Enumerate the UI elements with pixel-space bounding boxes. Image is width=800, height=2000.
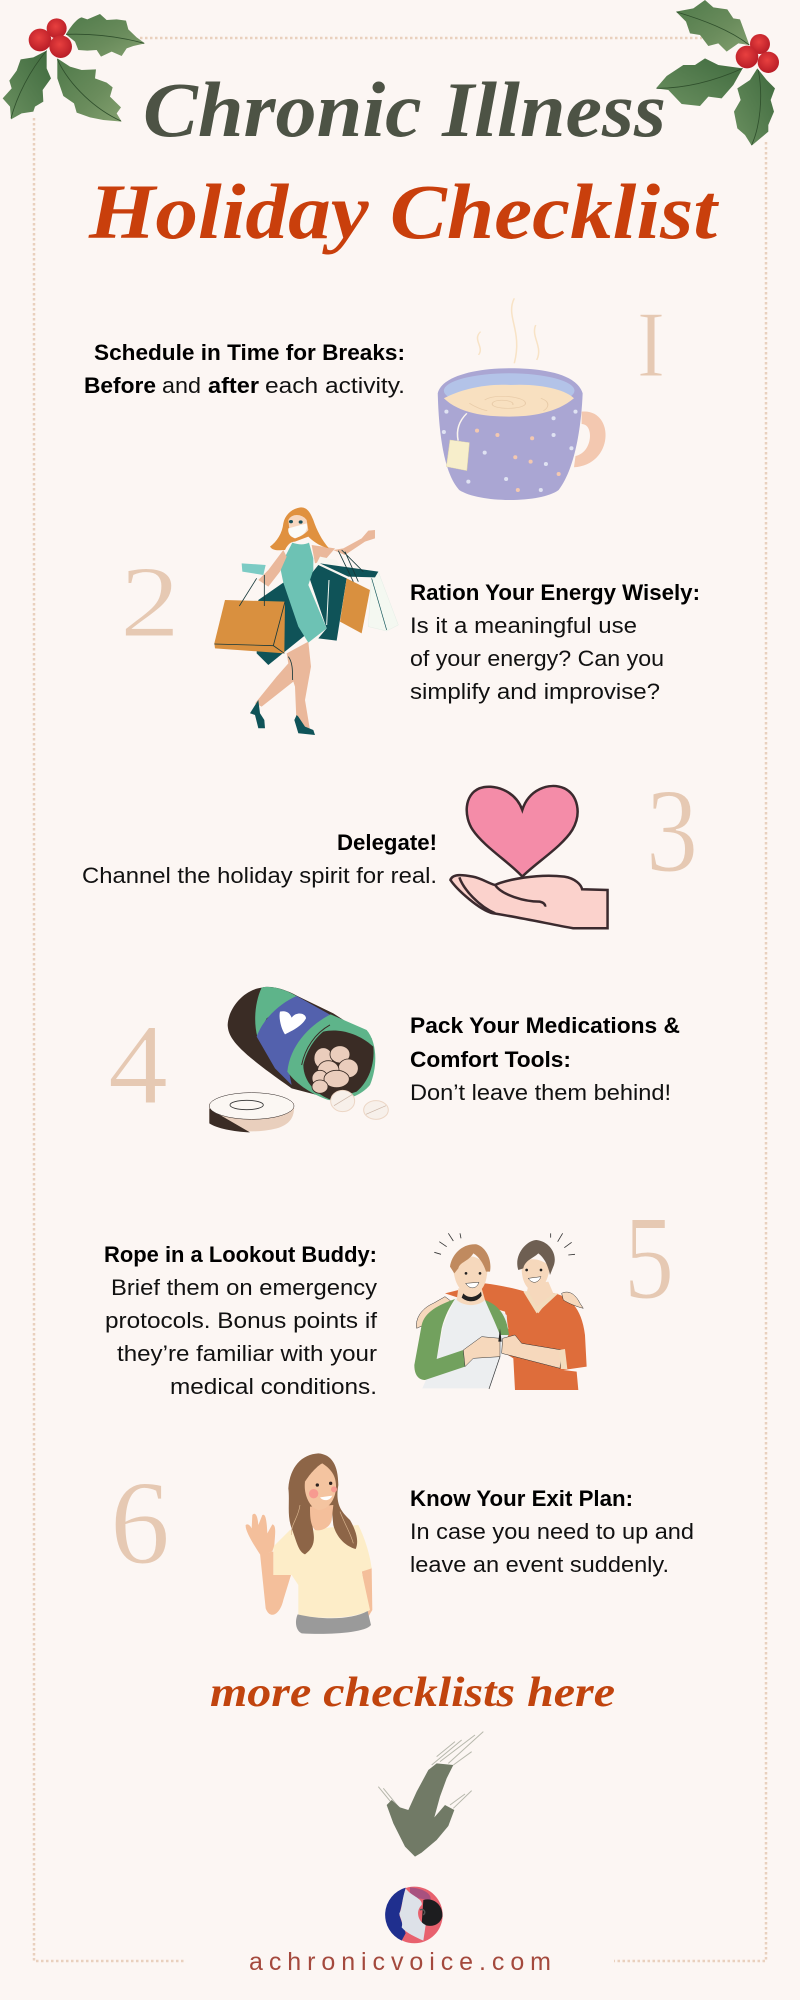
item 1 text: Schedule in Time for Breaks: xyxy=(94,340,405,365)
icon: heart held in a hand xyxy=(450,786,608,928)
item 5 text: Rope in a Lookout Buddy: xyxy=(104,1242,377,1267)
illustration: waving woman xyxy=(246,1453,372,1634)
item 4 text: Comfort Tools: xyxy=(410,1047,571,1072)
number 3: 3 xyxy=(646,764,698,897)
logo xyxy=(385,1887,443,1943)
item 5 text: medical conditions. xyxy=(170,1374,377,1399)
item 1 text: after xyxy=(208,373,259,398)
item 6 text: leave an event suddenly. xyxy=(410,1552,669,1577)
item 2 text xyxy=(410,580,700,704)
title xyxy=(88,66,720,255)
number 6: 6 xyxy=(110,1456,170,1589)
title: Chronic Illness xyxy=(143,66,666,153)
item 2 text: Ration Your Energy Wisely: xyxy=(410,580,700,605)
item 6 text: Know Your Exit Plan: xyxy=(410,1486,633,1511)
website: achronicvoice.com xyxy=(249,1948,551,1976)
arrow: brushstroke pointing down xyxy=(378,1732,483,1857)
item 3 text: Channel the holiday spirit for real. xyxy=(82,863,437,888)
call to action heading: more checklists here xyxy=(210,1670,615,1716)
number 5: 5 xyxy=(624,1191,674,1324)
illustration: two friends xyxy=(414,1233,587,1390)
item 2 text: of your energy? Can you xyxy=(410,646,664,671)
holly decoration: top right xyxy=(656,0,779,146)
item 4 text: Don’t leave them behind! xyxy=(410,1080,671,1105)
item 1 text: Before xyxy=(84,373,156,398)
item 1 text: each activity. xyxy=(265,373,405,398)
item 4 text xyxy=(410,1013,680,1105)
title: Holiday Checklist xyxy=(88,168,720,255)
number 2: 2 xyxy=(120,546,180,659)
number 4: 4 xyxy=(108,1001,168,1128)
item 2 text: simplify and improvise? xyxy=(410,679,660,704)
item 3 text: Delegate! xyxy=(337,830,437,855)
icon: spilled pill bottle xyxy=(209,987,388,1132)
number 1: I xyxy=(637,293,665,397)
item 5 text: they’re familiar with your xyxy=(117,1341,377,1366)
item 4 text: Pack Your Medications & xyxy=(410,1013,680,1038)
item 6 text: In case you need to up and xyxy=(410,1519,694,1544)
holly decoration: top left xyxy=(3,14,145,122)
item 5 text: Brief them on emergency xyxy=(111,1275,377,1300)
item 5 text xyxy=(104,1242,378,1399)
item 6 text xyxy=(410,1486,694,1577)
item 5 text: protocols. Bonus points if xyxy=(105,1308,378,1333)
item 3 text xyxy=(82,830,437,888)
item 1 text xyxy=(84,340,405,398)
item 2 text: Is it a meaningful use xyxy=(410,613,637,638)
illustration: woman with shopping bags xyxy=(214,507,398,735)
item 1 text: and xyxy=(162,373,201,398)
icon: mug of tea xyxy=(438,298,606,500)
